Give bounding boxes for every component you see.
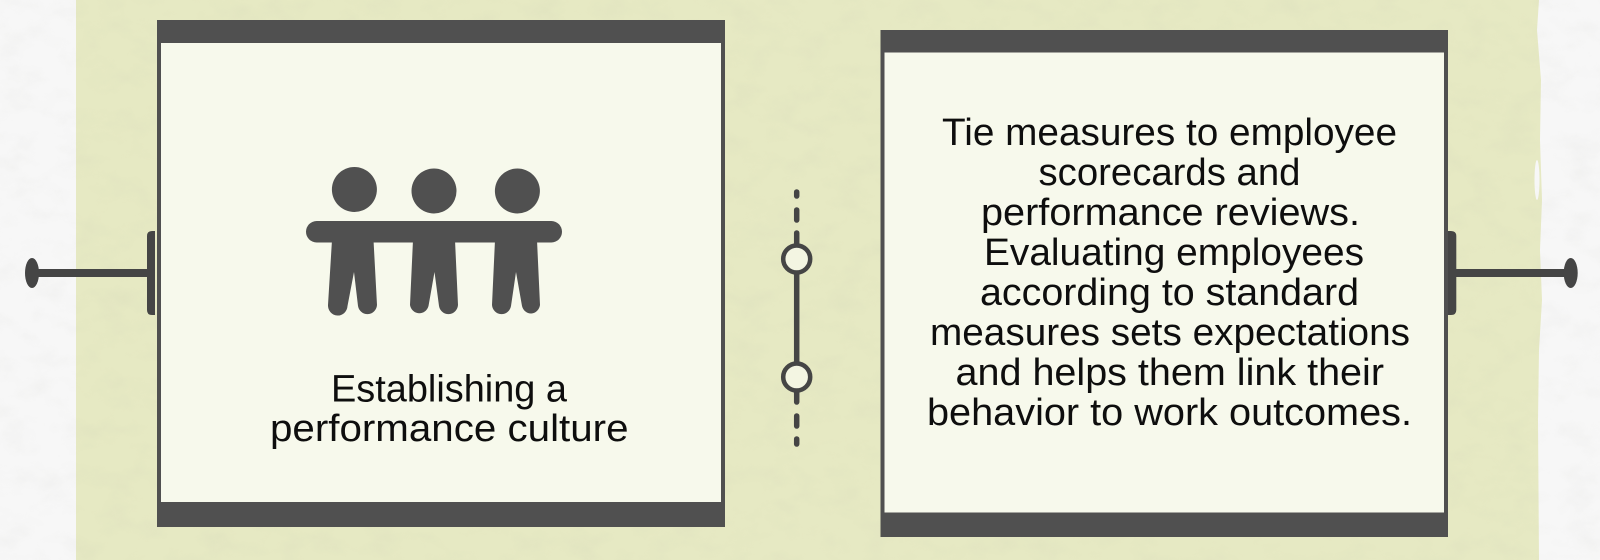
body text: scorecards and performance reviews: scorecards and xyxy=(1038,152,1300,194)
body text: scorecards and performance reviews: behavior to work outcomes. xyxy=(927,392,1412,434)
body text: scorecards and performance reviews xyxy=(927,112,1412,434)
caption: establishing a performance culture: Establishing a xyxy=(331,369,568,411)
panel: establishing a performance culture xyxy=(157,20,725,527)
caption: establishing a performance culture xyxy=(270,369,628,450)
right panel bottom bar xyxy=(880,512,1448,537)
body text: scorecards and performance reviews: performance reviews. xyxy=(981,192,1360,234)
body text: scorecards and performance reviews: according to standard xyxy=(980,272,1359,314)
icon: three people linked arm in arm xyxy=(306,167,562,316)
left connector pin xyxy=(25,231,155,315)
right panel top bar xyxy=(880,30,1448,52)
body text: scorecards and performance reviews: Evaluating employees xyxy=(984,232,1364,274)
right connector pin xyxy=(1448,231,1578,315)
body text: scorecards and performance reviews: measures sets expectations xyxy=(930,312,1410,354)
panel: tie measures to employee scorecards xyxy=(880,30,1448,537)
body text: scorecards and performance reviews: and helps them link their xyxy=(956,352,1384,394)
body text: scorecards and performance reviews: Tie measures to employee xyxy=(942,112,1397,154)
right panel frame xyxy=(882,32,1446,535)
caption: establishing a performance culture: performance culture xyxy=(270,408,628,450)
left panel frame xyxy=(159,22,723,525)
center timeline connector xyxy=(783,192,810,444)
left panel bottom bar xyxy=(157,502,725,527)
left panel top bar xyxy=(157,20,725,43)
